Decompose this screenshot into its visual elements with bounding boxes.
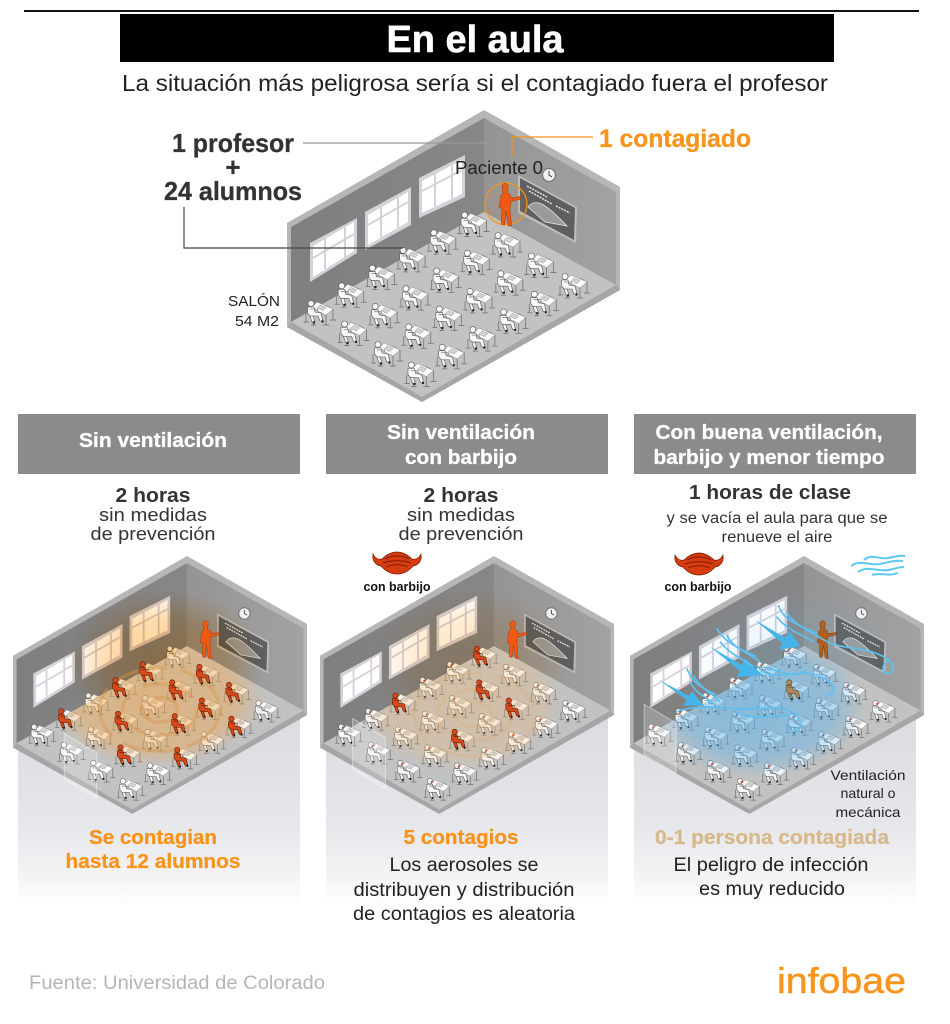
subtitle: La situación más peligrosa sería si el contagiado fuera el profesor (122, 70, 828, 96)
result text: Los aerosoles se (390, 855, 538, 876)
header (18, 414, 300, 474)
label: ventilacion: Ventilación (830, 767, 906, 783)
label: ventilacion: natural o (840, 785, 896, 801)
result text: El peligro de infección (674, 855, 868, 876)
column 3: buena ventilacion (630, 414, 924, 906)
title (120, 14, 834, 62)
result text (353, 827, 575, 925)
icon: mask: con barbijo (364, 580, 431, 594)
duration text: sin medidas (407, 505, 515, 525)
classroom: 5 infected (320, 556, 614, 814)
students (304, 212, 590, 386)
label: ventilacion: mecánica (836, 804, 901, 820)
label: 1 profesor + 24 alumnos: + (225, 152, 241, 182)
label: 1 profesor + 24 alumnos: 1 profesor (172, 128, 294, 158)
header: Con buena ventilación, (656, 422, 882, 444)
source: Fuente: Universidad de Colorado (29, 973, 325, 994)
result text: es muy reducido (699, 879, 845, 900)
label: salon (228, 293, 280, 330)
background fade (326, 700, 608, 906)
airflow arrows and currents (659, 605, 893, 732)
icon: mask (664, 553, 732, 594)
duration text: renueve el aire (722, 529, 832, 546)
result text: distribuyen y distribución (354, 880, 574, 901)
icon: mask: con barbijo (664, 580, 732, 594)
connector: alumnos (184, 207, 403, 248)
result text: 5 contagios (404, 827, 518, 849)
connector: profesor (303, 143, 500, 159)
label: 1 profesor + 24 alumnos: 24 alumnos (164, 176, 302, 206)
header: Sin ventilación (387, 422, 535, 444)
header: con barbijo (405, 447, 517, 469)
label: 1 contagiado: 1 contagiado (599, 125, 751, 153)
panel: main classroom (287, 110, 620, 402)
label: salon: 54 M2 (235, 313, 279, 330)
label: 1 profesor + 24 alumnos (164, 128, 302, 206)
icon: mask (364, 552, 431, 594)
duration text: y se vacía el aula para que se (666, 510, 888, 527)
duration text: de prevención (398, 524, 524, 544)
result text (66, 827, 240, 873)
duration text: 2 horas (424, 485, 498, 507)
label: salon: SALÓN (228, 293, 280, 310)
label: ventilacion (830, 767, 906, 820)
label: paciente 0: Paciente 0 (455, 158, 543, 178)
classroom: ventilated (630, 556, 924, 814)
top rule (24, 10, 919, 12)
duration text: de prevención (90, 524, 216, 544)
header: barbijo y menor tiempo (654, 447, 884, 469)
background fade (634, 700, 916, 906)
background fade (18, 700, 300, 906)
teacher: patient zero (485, 183, 527, 226)
title: En el aula (386, 19, 564, 61)
duration text (398, 485, 524, 544)
duration text: 1 horas de clase (689, 482, 851, 504)
header (634, 414, 916, 474)
header (326, 414, 608, 474)
duration text (666, 482, 888, 546)
result text (655, 827, 890, 900)
icon: wind (851, 556, 905, 575)
classroom: 12 infected (13, 556, 307, 814)
result text: 0-1 persona contagiada (655, 827, 890, 849)
result text: Se contagian (89, 827, 217, 849)
logo: infobae: infobae (777, 960, 906, 1001)
duration text (90, 485, 216, 544)
header: Sin ventilación (79, 430, 227, 452)
result text: de contagios es aleatoria (353, 904, 575, 925)
result text: hasta 12 alumnos (66, 851, 240, 873)
column 1: sin ventilacion (13, 414, 307, 906)
duration text: 2 horas (116, 485, 190, 507)
duration text: sin medidas (99, 505, 207, 525)
connector: contagiado (512, 137, 593, 157)
column 2: sin ventilacion con barbijo (320, 414, 614, 925)
